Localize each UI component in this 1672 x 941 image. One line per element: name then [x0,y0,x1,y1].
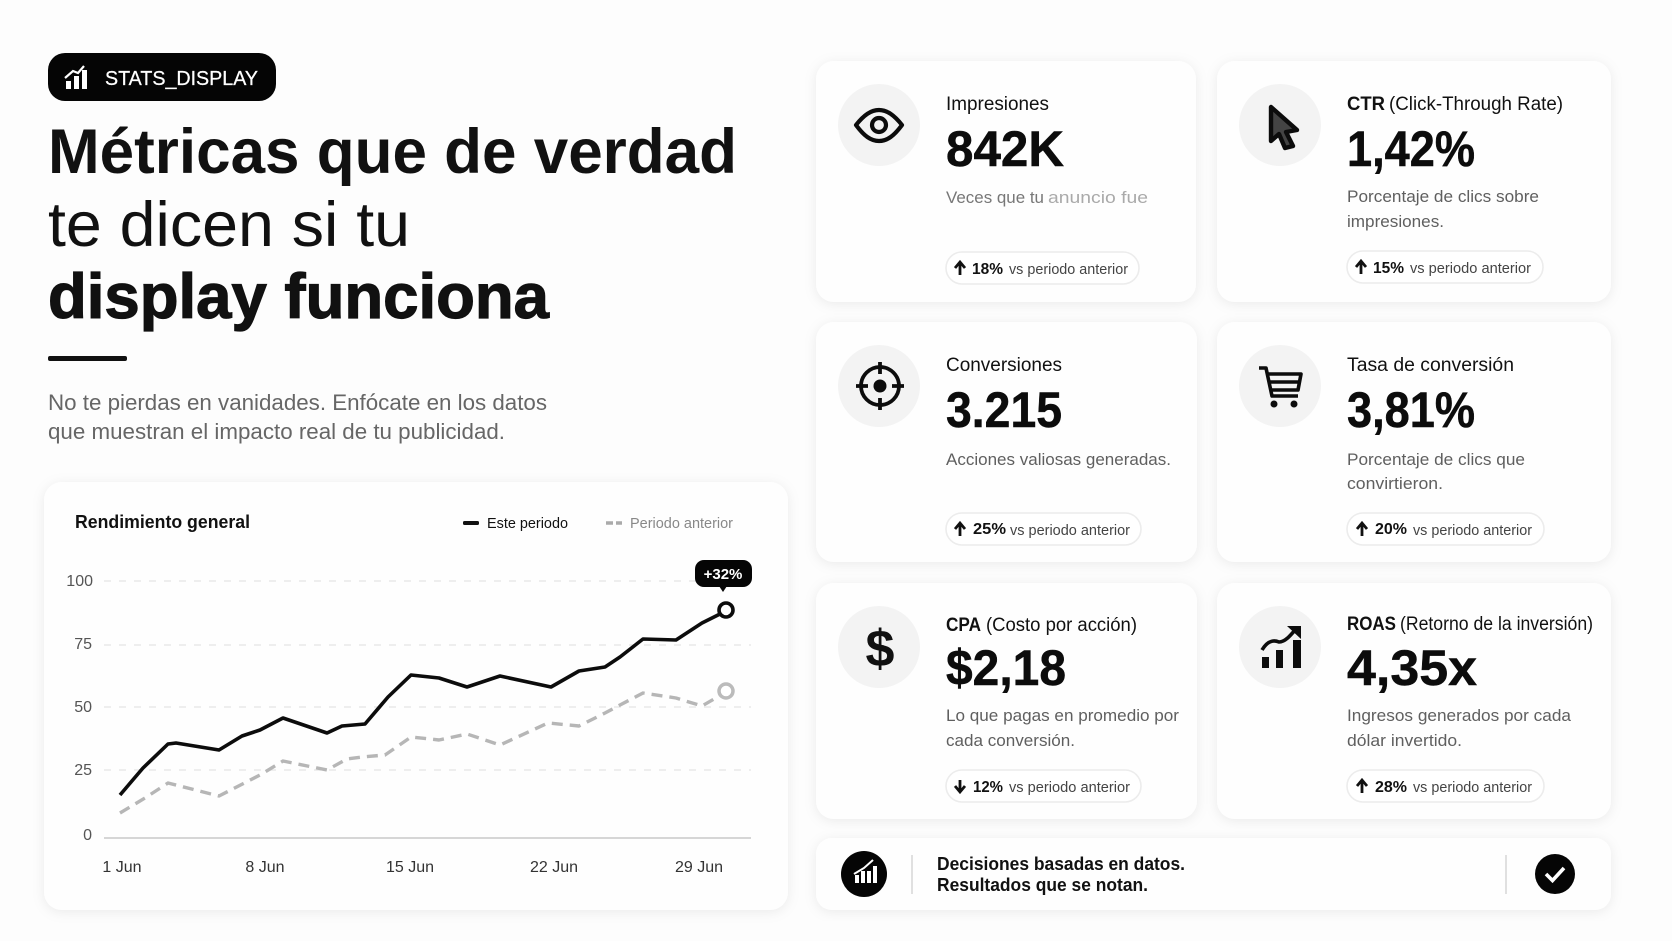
panel: footer banner [816,838,1611,910]
trend badge: vs periodo anterior [1009,262,1128,278]
panel: Impresiones: anuncio fue [1048,188,1148,207]
panel: Conversiones: Acciones valiosas generadas. [946,450,1171,469]
callout: +32%: +32% [704,566,742,583]
line: periodo anterior [120,684,733,813]
x axis labels: 1 Jun [102,859,142,876]
x axis labels: 29 Jun [675,859,723,876]
y axis labels: 75 [74,636,92,653]
footer message: Resultados que se notan. [937,875,1148,895]
tag label: STATS_DISPLAY [105,68,258,90]
trend badge: 18% [972,261,1003,278]
callout: +32% [695,560,752,592]
panel: CPA: cada conversión. [946,731,1075,750]
trend badge [1347,770,1544,802]
subtitle: No te pierdas en vanidades. Enfócate en los datos [48,390,547,415]
panel: CTR: 1,42% [1347,121,1475,177]
icon: small bar chart with arrow [65,66,87,89]
panel: ROAS: Ingresos generados por cada [1347,706,1572,725]
panel: CPA [816,583,1197,819]
subtitle: que muestran el impacto real de tu publicidad. [48,419,505,444]
panel: rendimiento general chart [44,482,788,910]
panel: Tasa de conversión: convirtieron. [1347,474,1443,493]
trend badge: vs periodo anterior [1009,780,1130,796]
trend badge: vs periodo anterior [1010,523,1130,539]
icon: eye [856,110,902,141]
panel: CTR: CTR [1347,94,1385,115]
subtitle [48,390,547,444]
icon: dollar: $ [866,620,895,678]
icon: chart in black circle [841,851,887,897]
trend badge [1347,513,1544,545]
legend: Este periodo [487,515,568,532]
x axis labels [102,859,723,876]
panel: CPA: (Costo por acción) [986,615,1137,636]
icon: cursor [1271,107,1297,148]
y axis labels: 50 [74,699,92,716]
panel: ROAS: dólar invertido. [1347,731,1462,750]
trend badge: 20% [1375,521,1407,538]
panel: Impresiones: 842K [946,121,1064,177]
x axis labels: 8 Jun [245,859,285,876]
panel: Impresiones: Impresiones [946,94,1049,115]
tag pill: STATS_DISPLAY [48,53,276,101]
icon: growth chart [1262,626,1301,668]
panel: ROAS: 4,35x [1347,640,1477,696]
icon: target [856,362,904,410]
panel: CTR: impresiones. [1347,212,1444,231]
trend badge [946,513,1141,545]
x axis labels: 22 Jun [530,859,578,876]
legend [463,515,733,532]
panel: CTR: (Click-Through Rate) [1389,94,1563,115]
panel: CPA: Lo que pagas en promedio por [946,706,1179,725]
panel: ROAS: ROAS [1347,614,1396,635]
panel: CPA: $2,18 [946,640,1066,696]
footer message: Decisiones basadas en datos. [937,854,1185,874]
trend badge: 25% [973,521,1006,538]
y axis labels: 100 [66,573,93,590]
trend badge: 15% [1373,260,1404,277]
panel: ROAS: (Retorno de la inversión) [1400,614,1593,635]
icon: check [1535,854,1575,894]
y axis labels: 0 [83,827,92,844]
line: este periodo [120,603,733,795]
y axis labels: 25 [74,762,92,779]
trend badge [946,252,1139,284]
title: display funciona [48,262,550,332]
title [48,117,737,332]
title: Métricas que de verdad [48,117,737,187]
title underline rule [48,356,127,361]
footer message [937,854,1185,895]
trend badge [1347,251,1543,283]
panel: ROAS [1217,583,1611,819]
panel: Impresiones [816,61,1196,302]
panel: CPA: CPA [946,615,981,636]
trend badge [946,770,1141,802]
panel: Conversiones: Conversiones [946,355,1062,376]
panel: Impresiones: Veces que tu [946,188,1044,207]
trend badge: vs periodo anterior [1413,780,1532,796]
legend: Periodo anterior [630,515,733,532]
y axis labels [66,573,93,844]
panel: CTR [1217,61,1611,302]
trend badge: 12% [973,779,1003,796]
panel: Tasa de conversión: 3,81% [1347,382,1475,438]
x axis labels: 15 Jun [386,859,434,876]
panel: CTR: Porcentaje de clics sobre [1347,187,1539,206]
icon: shopping cart [1259,368,1301,408]
panel: Conversiones [816,322,1197,562]
panel: Tasa de conversión [1217,322,1611,562]
trend badge: vs periodo anterior [1410,261,1531,277]
panel: Conversiones: 3.215 [946,382,1062,438]
trend badge: 28% [1375,779,1407,796]
panel: Tasa de conversión: Tasa de conversión [1347,355,1514,376]
trend badge: vs periodo anterior [1413,523,1532,539]
chart heading: Rendimiento general [75,512,250,532]
panel: Tasa de conversión: Porcentaje de clics que [1347,450,1525,469]
title: te dicen si tu [48,190,410,260]
